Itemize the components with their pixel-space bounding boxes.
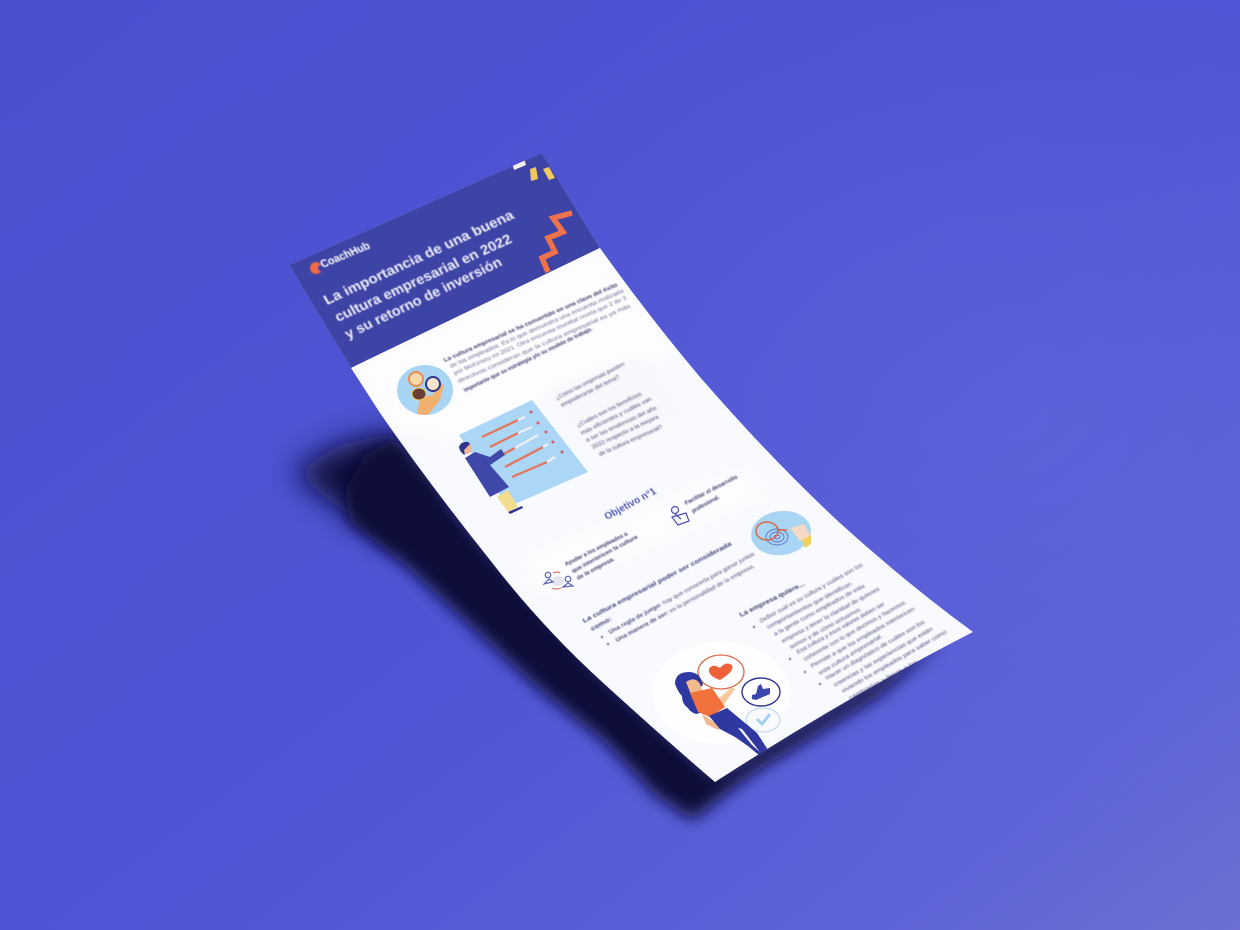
icon: heart bubble	[698, 655, 744, 689]
objective text: Facilitar el desarrollo	[684, 474, 739, 507]
band: objectives	[520, 470, 765, 595]
objective text: Ayudar a los empleados a	[564, 531, 629, 568]
title	[321, 207, 517, 342]
mockup scene	[280, 88, 1240, 930]
header band	[289, 153, 600, 368]
confetti	[512, 160, 555, 181]
title: y su retorno de inversión	[342, 255, 505, 342]
mockup scene: directivos consideran que la cultura empresarial es ya más	[456, 302, 632, 384]
logo	[310, 240, 373, 274]
question text: empoderarse del tema?	[560, 374, 621, 409]
title: La importancia de una buena	[321, 207, 517, 308]
question text	[555, 361, 664, 458]
icon: plant	[672, 506, 689, 525]
company list: a la gente como empleados de esta	[772, 582, 866, 637]
band: questions	[545, 355, 680, 458]
woman illustration	[675, 654, 781, 754]
company list: esta cultura empresarial.	[818, 633, 884, 677]
icon: orange stairs	[542, 213, 572, 272]
culture section: Una manera de ser: es la personalidad de la empresa.	[614, 562, 756, 643]
company list: comportamientos que identifican	[765, 581, 853, 630]
culture section	[581, 540, 756, 645]
company list: Permite a que los empleados interioricen	[809, 606, 916, 669]
objective text	[564, 474, 739, 582]
icon: thumbs up bubble	[742, 678, 780, 706]
company list: cambiarlas y llevar a los	[848, 659, 919, 701]
mockup scene: por McKinsey en 2021. Otra encuesta mundial revela que 2 de 3	[452, 294, 628, 376]
culture section: como:	[589, 615, 613, 632]
paper white panel	[351, 248, 973, 782]
question text: a ser las tendencias del año	[585, 405, 658, 443]
paper sheet	[289, 153, 973, 782]
mockup scene: de los empleados. Es lo que demuestra una encuesta realizada	[448, 287, 625, 369]
presenter	[459, 442, 523, 514]
company list: somos y de cómo actuamos.	[789, 606, 863, 650]
culture section: Una regla de juego: hay que conocerla para ganar juntos	[607, 551, 756, 635]
icon: check bubble	[746, 708, 780, 732]
woman figure	[675, 672, 768, 756]
intro paragraph	[442, 281, 632, 393]
company list: Hacer un diagnóstico de cuáles son los	[824, 618, 926, 681]
question text: ¿Cuáles son los beneficios	[576, 391, 644, 429]
question text: ¿Cómo las empresas pueden	[555, 361, 626, 401]
icon: two people	[544, 572, 573, 589]
band: upper white area	[351, 248, 680, 440]
logo: CoachHub	[318, 240, 373, 270]
objective text: de la empresa.	[576, 556, 617, 582]
page shadow	[292, 432, 945, 820]
title: cultura empresarial en 2022	[332, 231, 515, 325]
company list: Esa cultura y esos valores deben ser	[795, 601, 886, 655]
company list: coherente con lo que decimos y hacemos.	[802, 599, 908, 662]
company list: empresa y tener la claridad de quienes	[780, 585, 881, 644]
board bars	[482, 410, 564, 477]
icon: fingerprint magnifier	[748, 507, 814, 559]
company list: viviendo los empleados para saber como	[840, 628, 948, 694]
objective text: profesional.	[690, 494, 721, 514]
heading: objetivo: Objetivo n°1	[602, 486, 659, 522]
chart illustration: presenter at board	[459, 400, 588, 514]
mockup scene: La cultura empresarial poder ser considerada	[581, 540, 733, 624]
company list: Definir cuál es su cultura y cuáles son los	[758, 562, 864, 624]
company list: La empresa quiere...	[738, 581, 806, 619]
bands inside paper	[354, 248, 676, 425]
company list	[738, 562, 948, 701]
icon: team avatars in hand	[397, 365, 453, 415]
question text: 2022 respecto a la mejora	[591, 414, 660, 451]
mockup scene: La cultura empresarial se ha convertido en una clave del éxito	[442, 281, 619, 363]
intro paragraph: importante que su estrategia y/o su modelo de trabajo.	[463, 326, 594, 393]
company list: creencias y las experiencias que están	[832, 626, 934, 688]
question text: de la cultura empresarial?	[598, 424, 664, 458]
question text: más eficientes y cuáles van	[580, 396, 653, 436]
objective text: que interioricen la cultura	[571, 534, 639, 575]
